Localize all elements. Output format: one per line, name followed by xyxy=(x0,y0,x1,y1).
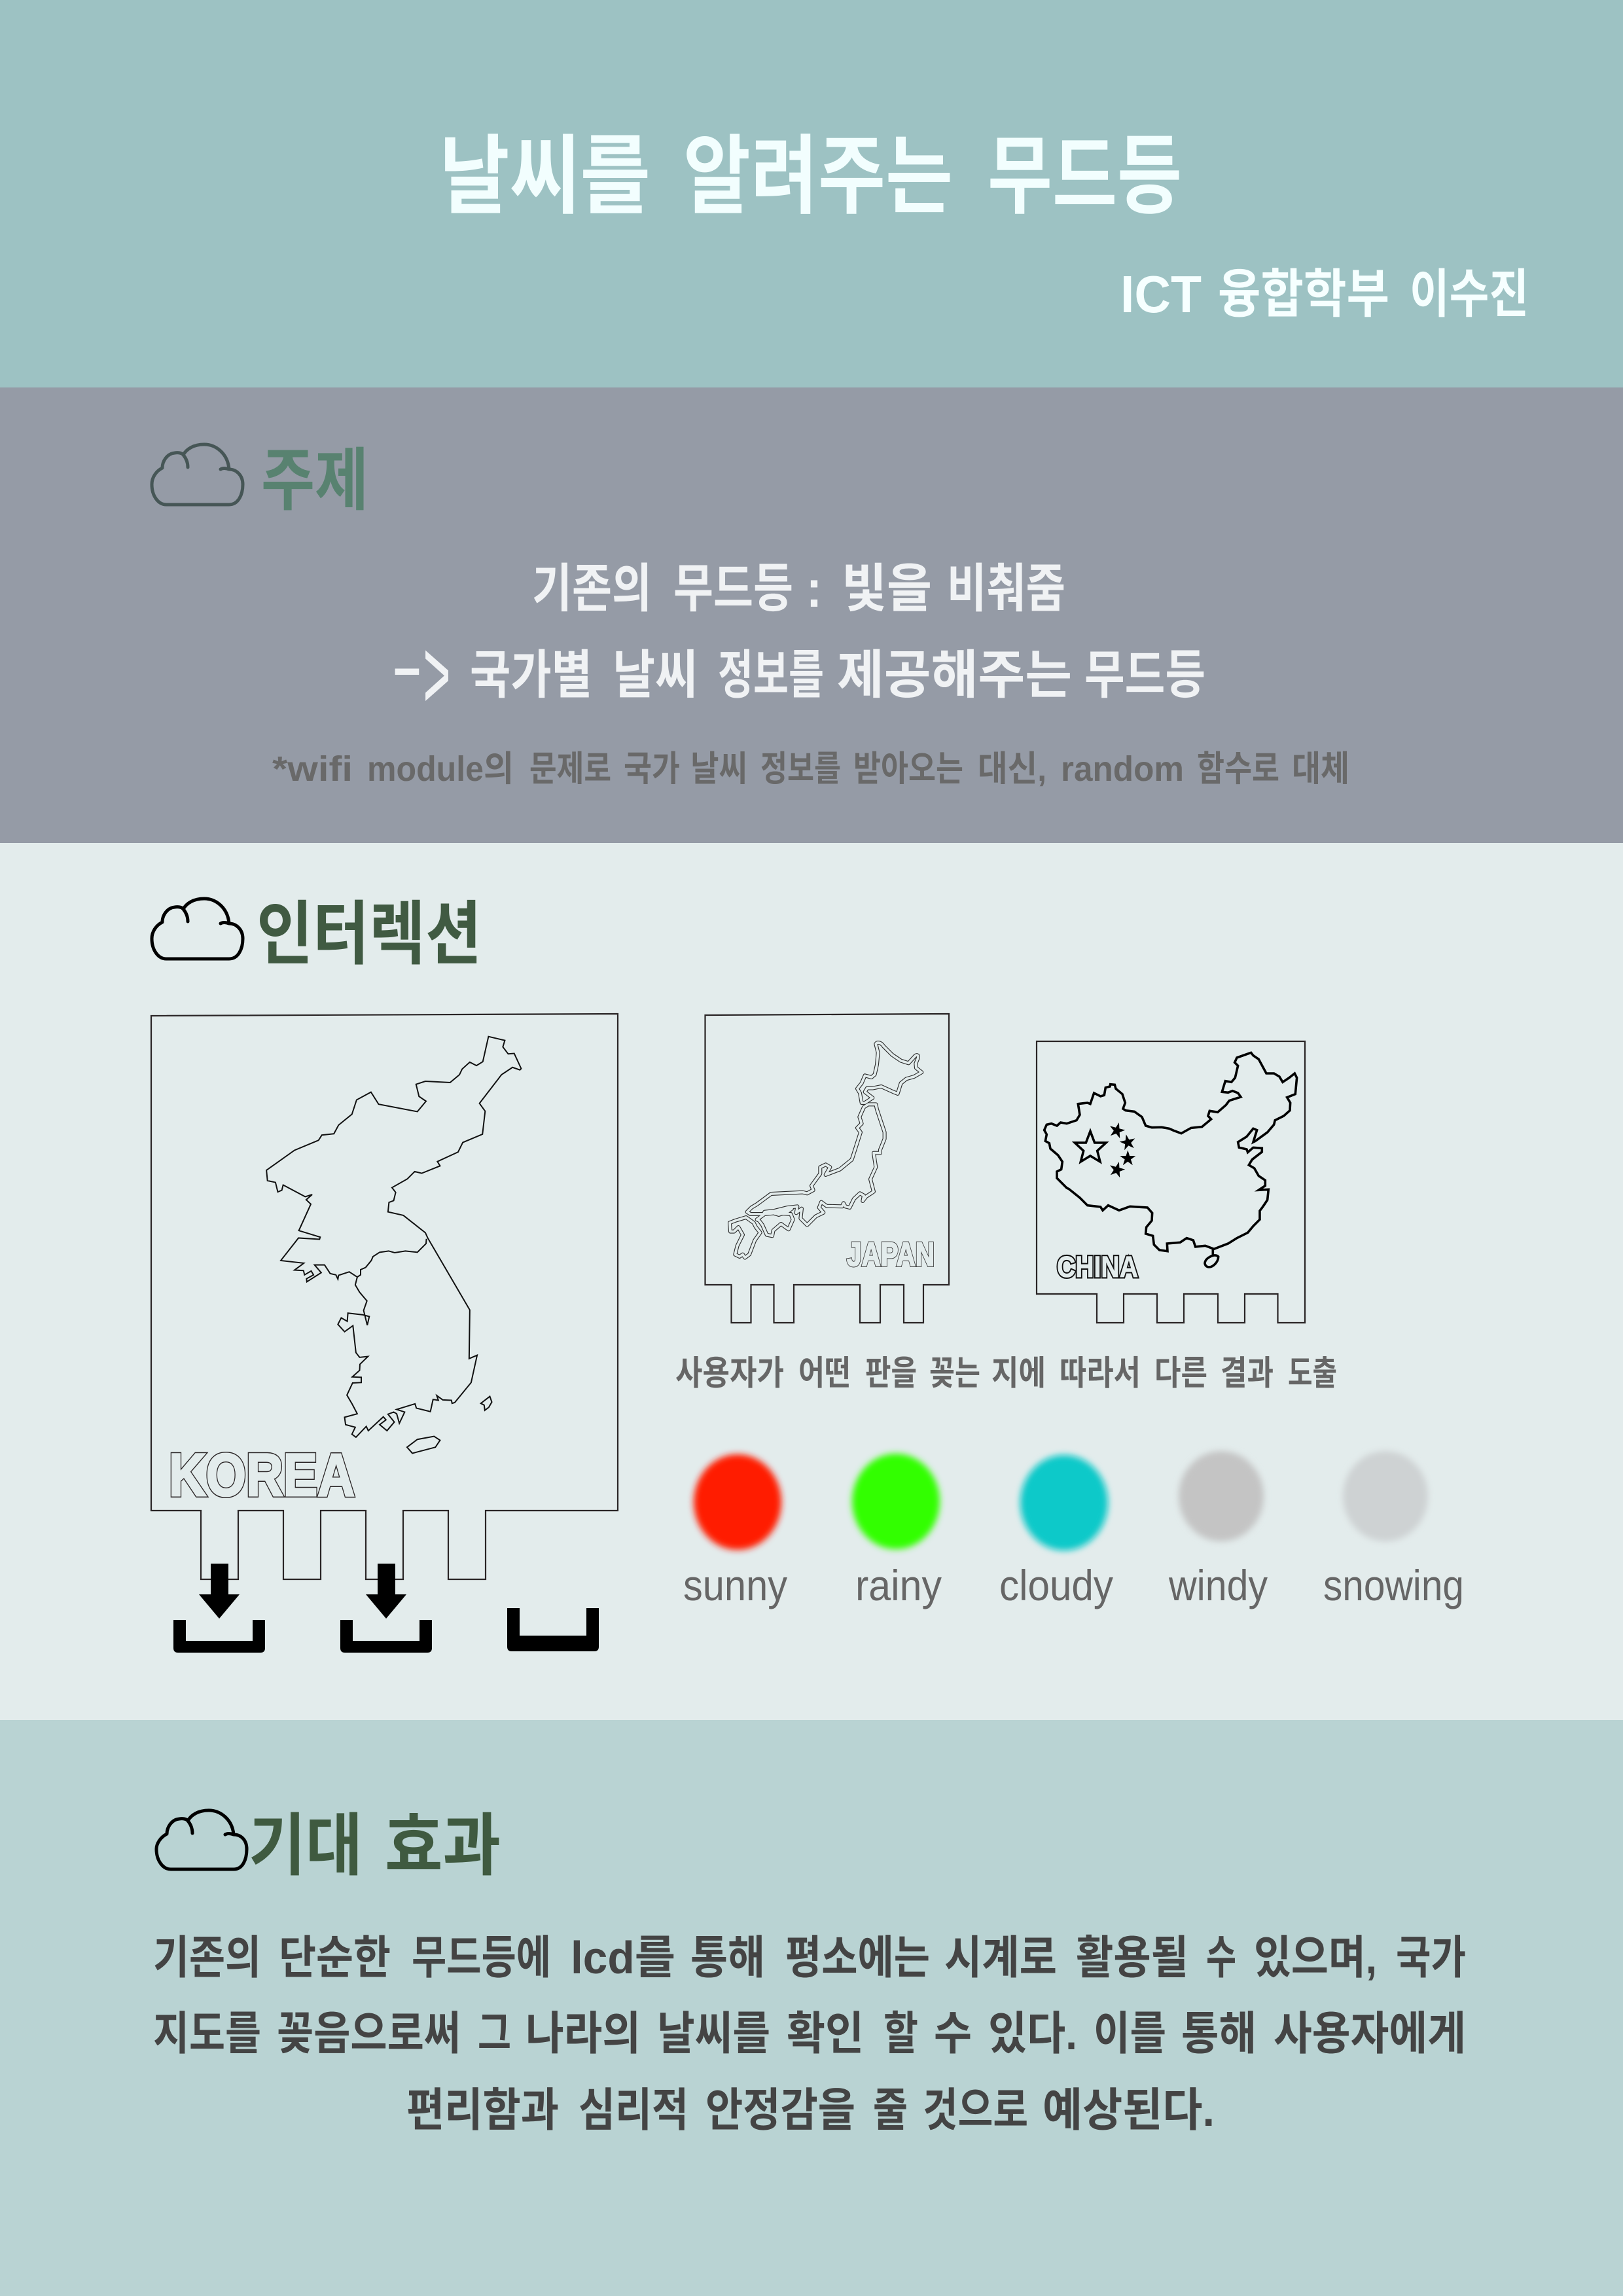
caption: 지에 xyxy=(991,1355,1046,1393)
body line 1: 시계로 xyxy=(944,1932,1057,1983)
panel: topic xyxy=(0,387,1623,843)
author line: ICT xyxy=(1120,265,1202,323)
topic footnote: 받아오는 xyxy=(853,749,963,789)
body line 2: 통해 xyxy=(1181,2008,1257,2059)
topic footnote: 정보를 xyxy=(760,749,841,789)
icons: small stars xyxy=(1107,1121,1137,1178)
heading: expected effects: 효과 xyxy=(385,1808,501,1884)
topic line 2: > xyxy=(423,620,450,728)
light: rainy xyxy=(852,1454,940,1549)
topic line 1: 기존의 xyxy=(532,560,652,618)
topic line 2 text: 날씨 xyxy=(613,646,698,704)
topic footnote: 문제로 xyxy=(529,749,611,789)
body line 2: 그 xyxy=(478,2008,511,2059)
panel: header xyxy=(0,0,1623,387)
heading: interaction: 인터렉션 xyxy=(257,896,482,973)
label: JAPAN: JAPAN xyxy=(847,1236,935,1273)
body line 1: 평소에는 xyxy=(785,1932,930,1983)
topic footnote: 대신, xyxy=(978,749,1046,789)
label: rainy: rainy xyxy=(855,1561,942,1609)
topic line 1: 빛을 xyxy=(842,560,932,618)
icon: arrow into slot 2 xyxy=(340,1564,432,1653)
icon: cloud xyxy=(156,1810,247,1869)
label: KOREA: KOREA xyxy=(169,1442,355,1509)
icon: arrow into slot 1 xyxy=(173,1564,265,1653)
body line 1: 기존의 xyxy=(153,1932,261,1983)
body line 3: 예상된다. xyxy=(1043,2085,1215,2136)
label: windy: windy xyxy=(1168,1561,1268,1609)
panel: interaction xyxy=(0,843,1623,1720)
body line 1: 국가 xyxy=(1396,1932,1466,1983)
title: 날씨를 xyxy=(439,128,651,224)
body line 1: 활용될 xyxy=(1076,1932,1188,1983)
light: cloudy xyxy=(1020,1455,1108,1551)
heading: expected effects: 기대 xyxy=(249,1808,363,1884)
light: windy xyxy=(1179,1451,1264,1541)
topic line 2 text: 정보를 xyxy=(718,646,824,704)
icon: cloud xyxy=(152,899,243,959)
author line: 이수진 xyxy=(1410,265,1529,323)
icon: cloud xyxy=(152,444,243,505)
body line 2: 나라의 xyxy=(526,2008,641,2059)
Korea board xyxy=(151,1014,618,1579)
light: snowing xyxy=(1343,1451,1428,1541)
body line 1: 수 xyxy=(1206,1932,1236,1983)
body line 2: 이를 xyxy=(1094,2008,1166,2059)
topic footnote: 날씨 xyxy=(690,749,747,789)
body line 2: 확인 xyxy=(787,2008,864,2059)
icon: large star xyxy=(1075,1131,1106,1162)
body line 3: 것으로 xyxy=(923,2085,1028,2136)
body line 1: 무드등에 xyxy=(412,1932,551,1983)
body line 1: 단순한 xyxy=(279,1932,391,1983)
topic line 2 text: 무드등 xyxy=(1084,646,1205,704)
panel: expected effects xyxy=(0,1720,1623,2296)
label: snowing: snowing xyxy=(1323,1561,1464,1609)
title: 무드등 xyxy=(988,128,1182,224)
caption: 결과 xyxy=(1221,1355,1274,1393)
topic footnote: *wifi xyxy=(272,749,353,789)
topic footnote: 대체 xyxy=(1292,749,1349,789)
topic footnote: 국가 xyxy=(624,749,680,789)
Japan board xyxy=(705,1014,949,1323)
body line 2: 사용자에게 xyxy=(1274,2008,1466,2059)
map: China xyxy=(1044,1052,1297,1267)
caption: 어떤 xyxy=(798,1355,851,1393)
light: sunny xyxy=(694,1454,781,1550)
author line: 융합학부 xyxy=(1218,265,1389,323)
topic line 1: : xyxy=(806,560,822,618)
label: JAPAN: JAPAN xyxy=(847,1236,935,1273)
body line 1: 있으며, xyxy=(1254,1932,1377,1983)
caption: 도출 xyxy=(1288,1355,1337,1393)
topic footnote: 함수로 xyxy=(1197,749,1279,789)
caption: 따라서 xyxy=(1060,1355,1141,1393)
body line 2: 날씨를 xyxy=(657,2008,770,2059)
label: sunny: sunny xyxy=(683,1561,787,1609)
body line 3: 안정감을 xyxy=(705,2085,855,2136)
island: Hainan xyxy=(1205,1248,1219,1267)
body line 2: 수 xyxy=(934,2008,972,2059)
label: CHINA: CHINA xyxy=(1057,1250,1138,1283)
topic line 2 text: 제공해주는 xyxy=(837,646,1072,704)
label: cloudy: cloudy xyxy=(999,1561,1113,1609)
caption: 꽂는 xyxy=(929,1355,980,1393)
map: Korea xyxy=(266,1037,521,1453)
title: 알려주는 xyxy=(683,128,953,224)
map: Japan xyxy=(730,1043,921,1258)
icon: empty slot xyxy=(507,1608,599,1651)
body line 2: 꽂음으로써 xyxy=(277,2008,461,2059)
body line 3: 줄 xyxy=(873,2085,908,2136)
caption: 판을 xyxy=(865,1355,917,1393)
topic line 2 text: 국가별 xyxy=(470,646,592,704)
caption: 사용자가 xyxy=(675,1355,784,1393)
topic line 2 xyxy=(391,620,1205,728)
body line 2: 할 xyxy=(883,2008,918,2059)
topic footnote: module의 xyxy=(367,749,514,789)
body line 3: 편리함과 xyxy=(406,2085,559,2136)
arrow dash: - xyxy=(391,638,423,696)
heading: topic: 주제 xyxy=(261,443,368,519)
body line 1: 통해 xyxy=(690,1932,765,1983)
China board xyxy=(1037,1041,1305,1323)
topic footnote: random xyxy=(1061,749,1184,789)
body line 1: lcd를 xyxy=(571,1932,675,1983)
topic line 1: 무드등 xyxy=(673,560,793,618)
label: KOREA: KOREA xyxy=(169,1442,355,1509)
body line 3: 심리적 xyxy=(579,2085,688,2136)
topic line 1: 비춰줌 xyxy=(947,560,1065,618)
caption: 다른 xyxy=(1154,1355,1207,1393)
body line 2: 있다. xyxy=(988,2008,1077,2059)
label: CHINA: CHINA xyxy=(1057,1250,1138,1283)
body line 2: 지도를 xyxy=(153,2008,261,2059)
